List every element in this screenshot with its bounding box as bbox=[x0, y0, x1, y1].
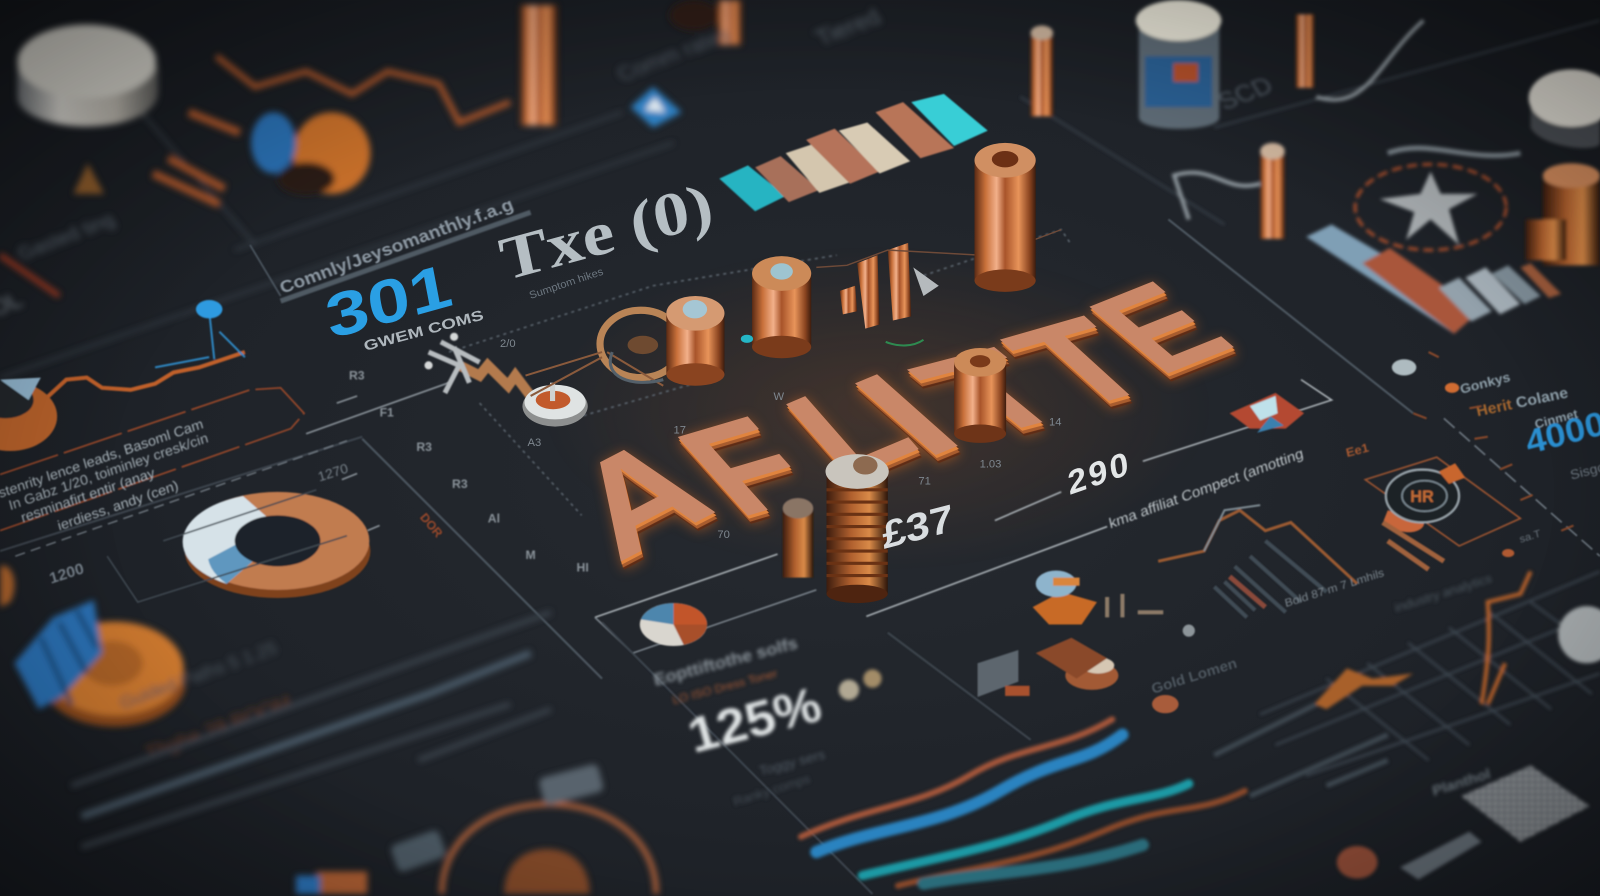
pie chart small bbox=[640, 603, 707, 646]
component: resistor spring and silver clip bbox=[424, 333, 531, 396]
panel: centre grid and frame lines bbox=[0, 212, 1600, 894]
axis labels: R3 bbox=[416, 440, 432, 454]
panel: bottom right bbox=[1214, 571, 1600, 880]
letter T second: T bbox=[974, 293, 1187, 432]
stat: 125%: 125% bbox=[682, 676, 827, 763]
faint strokes bbox=[1214, 704, 1388, 796]
letter A: A bbox=[544, 405, 737, 589]
text: caption right: sa.T bbox=[1519, 528, 1542, 546]
panel: right middle bbox=[1108, 352, 1600, 617]
token grey bbox=[1400, 832, 1482, 880]
mini line chart bbox=[1158, 505, 1357, 617]
text block: description: stenrity lence leads, Basoml Cam bbox=[0, 416, 205, 502]
label: Gonkys: Gonkys bbox=[1459, 369, 1512, 397]
panel: bottom centre right icons bbox=[640, 570, 1239, 713]
cylinder: blurred small front bbox=[783, 498, 813, 578]
bead copper bbox=[1337, 846, 1378, 879]
small tokens bbox=[296, 763, 604, 894]
diagonal chart lines bbox=[107, 490, 347, 602]
line chart: orange path bbox=[41, 352, 245, 403]
letter T first: T bbox=[881, 326, 1103, 458]
small axis numbers: 14 bbox=[1049, 417, 1061, 429]
text: sub caption: Sumptom hikes bbox=[528, 266, 605, 302]
small axis numbers: 1.03 bbox=[980, 458, 1001, 470]
icon: small gauge bbox=[978, 650, 1030, 697]
pixel patch bbox=[1461, 765, 1590, 842]
bead orange bbox=[1152, 695, 1179, 713]
panel: left middle bbox=[0, 300, 589, 602]
copper pin bbox=[1031, 26, 1053, 116]
heading: Comnly text: Comnly/Jeysomanthly.f.a.g bbox=[276, 194, 516, 297]
stat: 301: 301 bbox=[320, 250, 457, 352]
orange ticks bbox=[1413, 352, 1573, 531]
coin stack bbox=[1526, 163, 1600, 265]
chart: faint curve bbox=[82, 653, 531, 816]
text: Merit: Herit Colane bbox=[1475, 385, 1570, 420]
text block: description: ierdiess, andy (cen) bbox=[56, 478, 180, 534]
component: copper ring and wires bbox=[526, 310, 682, 396]
cylinder: striped front bbox=[826, 454, 889, 603]
bar chart: top centre bbox=[719, 94, 988, 211]
axis labels: R3 bbox=[452, 477, 468, 491]
text: Current: Cinmet bbox=[1533, 407, 1580, 431]
axis labels: F1 bbox=[380, 405, 394, 419]
text: bottom faint: Ranky comps bbox=[732, 771, 812, 809]
stat: caption: GWEM COMS bbox=[362, 307, 485, 354]
text: mini caption: Bold 87 m 7 Lmhils bbox=[1284, 567, 1385, 610]
stat: 290: 290 bbox=[1066, 445, 1130, 503]
icon: blue triangle badge bbox=[631, 87, 682, 128]
panel: bottom left: Guided Paths 5 1.25 bbox=[117, 637, 279, 713]
icon: copper bowl bbox=[1036, 638, 1118, 690]
label: faint text: Gold Lomen bbox=[1150, 656, 1239, 698]
small axis numbers: W bbox=[773, 391, 784, 403]
text: under stat: Toggy sers bbox=[758, 747, 827, 778]
text block: description: In Gabz 1/20, toiminley cresk/cin bbox=[7, 431, 210, 514]
icon: left copper ring bbox=[0, 378, 57, 451]
icon: copper gear far left bbox=[0, 566, 14, 607]
callout outline bbox=[0, 388, 304, 531]
line chart: blue dot stem bbox=[155, 300, 245, 367]
panel: top left charts bbox=[0, 0, 886, 378]
cyan bead bbox=[741, 335, 753, 343]
stream chart bbox=[801, 719, 1245, 886]
text: small orange: LO ISO Dress Toner bbox=[671, 667, 779, 707]
cylinder: left of row bbox=[666, 296, 724, 386]
line: orange blob bbox=[1314, 668, 1413, 709]
chip pie in box bbox=[1230, 393, 1304, 433]
text: faint caption: industry analytics bbox=[1393, 571, 1493, 615]
icon: orange machine bbox=[1033, 570, 1097, 625]
text: heading faint: Eopttiftothe solfs bbox=[652, 633, 799, 690]
axis labels: R3 bbox=[349, 369, 365, 383]
small axis numbers: A3 bbox=[528, 437, 541, 449]
copper pin bbox=[1296, 14, 1314, 88]
axis labels bbox=[349, 369, 589, 574]
text block: description: resminafirt entir (anay bbox=[19, 465, 157, 526]
orange ring bottom bbox=[442, 804, 656, 894]
component: silver button bbox=[522, 383, 588, 427]
letter L: L bbox=[757, 351, 943, 505]
small axis numbers: 70 bbox=[717, 529, 730, 541]
bars: diagonal orange stubs bbox=[153, 112, 240, 204]
copper glow under title bbox=[541, 245, 1214, 571]
panel: top right charts bbox=[1020, 0, 1600, 334]
heading: affiliate compact: kma affiliat Compect (amotting bbox=[1108, 446, 1305, 532]
copper pin blurred bbox=[520, 5, 557, 126]
cylinder: tall bbox=[974, 143, 1036, 292]
axis labels: HI bbox=[577, 560, 589, 574]
dashed underline bbox=[15, 441, 347, 556]
axis labels: M bbox=[526, 548, 536, 562]
label: 1270: 1270 bbox=[316, 461, 350, 484]
mini bars orange bbox=[1383, 522, 1444, 569]
chart: grid plot bbox=[1260, 571, 1600, 776]
icon: small copper cone bbox=[73, 163, 104, 194]
text: caption right bbox=[1502, 528, 1542, 557]
badge: HR dial: HR bbox=[1410, 488, 1434, 506]
small axis numbers bbox=[500, 338, 1061, 541]
text: right upper faint: SCD bbox=[1213, 72, 1278, 115]
label: orange side tag: DOR bbox=[417, 510, 445, 540]
line chart: top left orange bbox=[216, 56, 510, 122]
label: 1200: 1200 bbox=[48, 560, 86, 587]
text: top heading faint right: Tiered bbox=[810, 4, 886, 50]
small axis numbers: 71 bbox=[918, 476, 931, 488]
silver squiggle line bbox=[1173, 20, 1423, 219]
icon: silver jar bbox=[1136, 0, 1221, 129]
icon: copper disc with blue fist bbox=[14, 600, 186, 727]
label: orange: Ee1 bbox=[1345, 441, 1370, 460]
text: top left faint: Gasted ting bbox=[14, 209, 119, 264]
badge: HR dial bbox=[1365, 457, 1520, 546]
icon: small bars and bead bbox=[1107, 594, 1195, 637]
panel: bottom centre stat bbox=[652, 633, 1245, 886]
copper pin bbox=[1260, 143, 1285, 239]
cylinder: second bbox=[752, 256, 811, 358]
bead silver bbox=[1392, 359, 1416, 376]
beads bbox=[839, 669, 882, 700]
letter F: F bbox=[647, 391, 845, 543]
small axis numbers: 17 bbox=[673, 425, 686, 437]
panel: bottom left bbox=[0, 566, 656, 894]
stat: £37: £37 bbox=[880, 496, 955, 557]
bar chart: right slanted bbox=[1306, 225, 1561, 334]
icon: silver disc bbox=[1558, 606, 1600, 663]
axis labels: Al bbox=[488, 511, 500, 525]
copper pin small bbox=[669, 0, 742, 45]
component: small copper rods bbox=[816, 230, 1061, 345]
squiggle top right bbox=[1388, 148, 1520, 156]
letter I: I bbox=[820, 348, 993, 482]
text: faint lines: Thghe 29 ROOM bbox=[143, 692, 294, 765]
text: top heading faint: Comm rates bbox=[612, 23, 735, 86]
line: red trend bbox=[0, 255, 59, 296]
icon: silver cylinder bbox=[17, 25, 158, 127]
letter E: E bbox=[1058, 259, 1263, 398]
donut chart bbox=[183, 492, 370, 598]
heading: Txe (0): Txe (0) bbox=[494, 170, 719, 294]
title: AFFILIATE letters bbox=[544, 259, 1263, 589]
icon: blue and copper gear bbox=[251, 112, 370, 195]
line: orange spike bbox=[1482, 571, 1531, 704]
dial: star wheel bbox=[1355, 164, 1506, 250]
cylinder: on title bbox=[954, 348, 1006, 443]
small axis numbers: 2/0 bbox=[500, 338, 516, 350]
icon: silver cap right bbox=[1529, 69, 1600, 148]
text: label: Planthol bbox=[1431, 767, 1492, 800]
